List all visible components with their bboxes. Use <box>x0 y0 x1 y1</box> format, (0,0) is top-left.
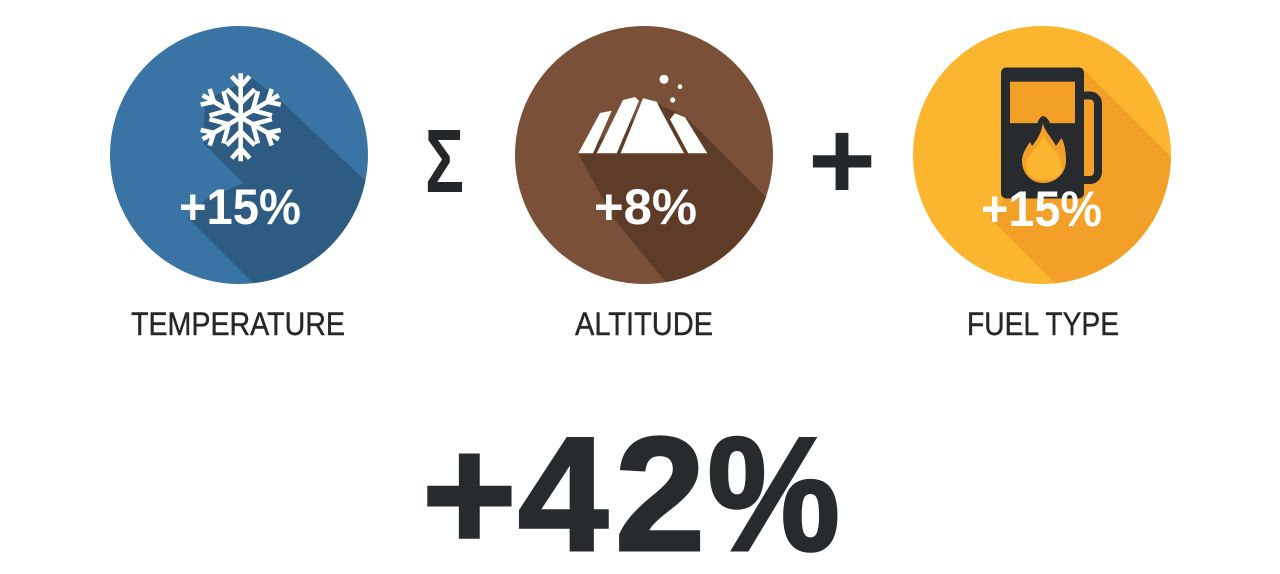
operator: sigma: Σ <box>425 112 464 212</box>
label: fuel type: FUEL TYPE <box>967 306 1119 342</box>
total: +42% <box>422 403 840 574</box>
panel: temperature <box>110 26 372 342</box>
panel: altitude <box>515 26 775 342</box>
value: +15%: +15% <box>981 181 1102 237</box>
panel: fuel type <box>913 26 1176 342</box>
icon: flame <box>1017 116 1071 187</box>
icon: snowflake <box>196 73 286 161</box>
value: +15%: +15% <box>179 179 301 235</box>
long shadow: temperature <box>188 78 372 292</box>
circle: temperature <box>110 26 368 284</box>
label: altitude: ALTITUDE <box>575 306 713 342</box>
circle: fuel type <box>913 26 1171 284</box>
value: +8%: +8% <box>594 179 697 235</box>
circle: altitude <box>515 26 773 284</box>
long shadow: altitude <box>578 104 775 292</box>
icon: fuel pump <box>1001 68 1098 198</box>
label: temperature: TEMPERATURE <box>131 306 345 342</box>
icon: mountain <box>578 75 707 153</box>
long shadow: fuel type <box>990 70 1176 292</box>
infographic <box>110 26 1171 553</box>
operator: plus: + <box>808 98 876 223</box>
